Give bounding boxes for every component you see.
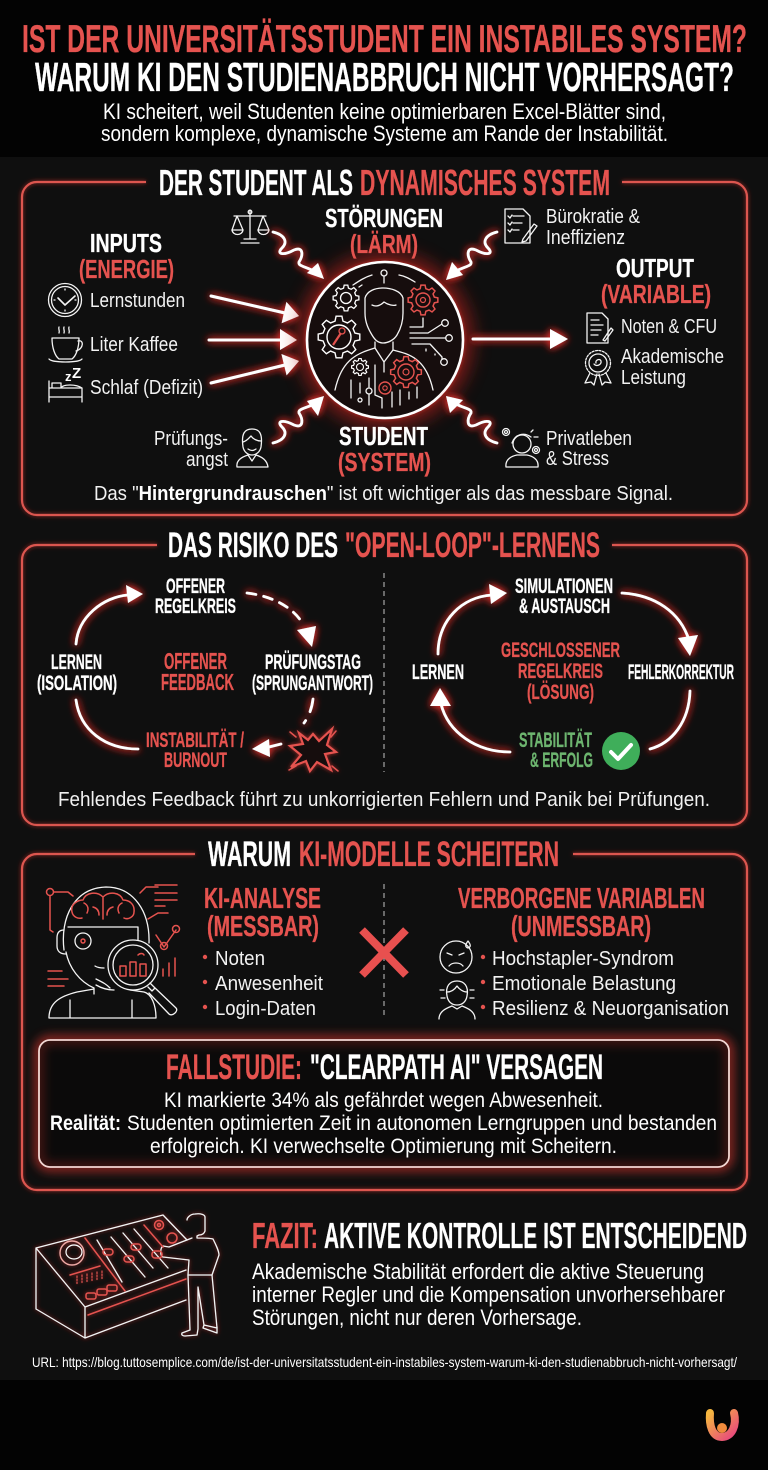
label: Störungen	[325, 203, 443, 259]
title block: sondern komplexe, dynamische Systeme am Rande der Instabilität.	[101, 121, 668, 146]
icon: logo	[710, 1413, 735, 1437]
callout: Fallstudie Clearpath AI: Realität:	[50, 1112, 121, 1135]
icon: overwhelmed person	[439, 981, 475, 1019]
node: Instabilität: BURNOUT	[164, 749, 227, 772]
divider line	[383, 884, 385, 1018]
icon: control console with operator	[36, 1214, 219, 1338]
arrows: open loop	[76, 585, 316, 757]
icon: stressed person	[502, 428, 540, 467]
output label: (VARIABLE)	[601, 279, 711, 309]
arrows: closed loop	[430, 584, 698, 752]
callout: Fallstudie Clearpath AI: KI markierte 34% als gefährdet wegen Abwesenheit.	[164, 1089, 603, 1112]
node: Stabilität: & ERFOLG	[530, 749, 593, 772]
inputs label: (ENERGIE)	[79, 254, 174, 284]
noise text: Prüfungsangst	[154, 428, 228, 471]
node: Simulationen: & AUSTAUSCH	[519, 595, 610, 618]
list: measurable data: Login-Daten	[215, 998, 316, 1020]
node: Stabilität	[519, 729, 593, 772]
list: measurable data: Noten	[215, 948, 265, 970]
panel: der Student als dynamisches System	[22, 162, 747, 515]
heading: KI-Modelle	[208, 835, 559, 874]
node: Lernen Isolation	[37, 651, 117, 695]
glow behind central circle	[297, 252, 473, 428]
divider line	[383, 573, 385, 772]
takeaway: Hintergrundrauschen: Das "Hintergrundrauschen" ist oft wichtiger als das messbare Signal.	[94, 483, 673, 505]
label: Störungen: (LÄRM)	[350, 229, 418, 259]
noise text: Prüfungsangst: Prüfungs-	[154, 428, 228, 450]
icon: bed with sleep marks: z	[65, 369, 72, 384]
node: Simulationen	[515, 575, 613, 618]
subheading: KI-Analyse: (MESSBAR)	[207, 911, 319, 943]
input text: Lernstunden: Lernstunden	[90, 290, 185, 312]
heading: Open-Loop	[168, 526, 600, 565]
conclusion text	[252, 1259, 725, 1330]
node: Instabilität: INSTABILITÄT /	[146, 729, 244, 752]
wavy arrow: top left	[273, 232, 324, 279]
takeaway: Feedback: Fehlendes Feedback führt zu unkorrigierten Fehlern und Panik bei Prüfungen.	[58, 789, 710, 811]
noise text: Privatleben: Privatleben	[546, 428, 632, 450]
node: Offener Regelkreis: REGELKREIS	[155, 595, 236, 618]
list: hidden variables	[481, 948, 729, 1020]
heading: KI-Modelle: KI-MODELLE SCHEITERN	[299, 835, 559, 874]
icon: bed with sleep marks	[49, 365, 82, 402]
label: Störungen: STÖRUNGEN	[325, 203, 443, 233]
wavy arrow: bottom right	[446, 396, 497, 443]
diagram: closed loop	[412, 575, 734, 772]
heading: Fazit: FAZIT:	[252, 1215, 318, 1256]
node: Simulationen: SIMULATIONEN	[515, 575, 613, 598]
circuit traces	[351, 270, 452, 408]
callout: Fallstudie Clearpath AI: erfolgreich. KI verwechselte Optimierung mit Scheitern.	[150, 1135, 617, 1158]
title block: KI scheitert, weil Studenten keine optimierbaren Excel-Blätter sind,	[103, 99, 666, 124]
noise text: Bürokratie: Bürokratie &	[546, 206, 641, 228]
icon: bed with sleep marks: Z	[72, 365, 81, 382]
center label: geschlossener Regelkreis: REGELKREIS	[518, 660, 603, 683]
callout: Fallstudie Clearpath AI: FALLSTUDIE:	[166, 1048, 302, 1087]
label: Student: (SYSTEM)	[338, 447, 431, 477]
node: Lernen Isolation: LERNEN	[51, 651, 102, 674]
node: Prüfungstag	[252, 651, 373, 695]
wavy arrow: top right	[446, 232, 497, 280]
output text: Leistung	[621, 346, 724, 389]
inputs label: INPUTS	[90, 228, 162, 258]
conclusion text: Akademische Stabilität erfordert die aktive Steuerung	[252, 1259, 704, 1284]
subheading: verborgene Variablen: (UNMESSBAR)	[511, 911, 651, 943]
output text: Noten: Noten & CFU	[621, 316, 717, 338]
center label: offener Feedback	[161, 648, 234, 695]
list: measurable data: Anwesenheit	[215, 973, 323, 995]
output text: Leistung: Akademische	[621, 346, 724, 368]
output text: Leistung: Leistung	[621, 367, 686, 389]
icon: rosette	[585, 350, 611, 385]
node: Lernen Isolation: (ISOLATION)	[37, 672, 117, 695]
icon: sad face	[440, 941, 472, 973]
heading: Open-Loop: DAS RISIKO DES	[168, 526, 338, 565]
label: Student: STUDENT	[339, 421, 428, 451]
node: Lernen: LERNEN	[412, 661, 464, 684]
callout: Fallstudie Clearpath AI	[39, 1040, 729, 1167]
inputs label	[79, 228, 174, 284]
gears	[318, 285, 438, 394]
noise text: Bürokratie	[546, 206, 641, 249]
title block	[22, 18, 747, 146]
node: Prüfungstag: (SPRUNGANTWORT)	[252, 672, 373, 695]
list: measurable data	[203, 948, 323, 1020]
icon: green check	[602, 732, 640, 770]
center label: geschlossener Regelkreis: GESCHLOSSENER	[501, 639, 620, 662]
icon: AI head with magnifier	[46, 885, 180, 1018]
panel: warum KI-Modelle scheitern	[22, 835, 747, 1190]
list: hidden variables: Hochstapler-Syndrom	[492, 948, 674, 970]
node: Prüfungstag: PRÜFUNGSTAG	[265, 651, 361, 674]
icon: scales	[232, 210, 269, 243]
icon: coffee cup	[49, 327, 82, 362]
node: Offener Regelkreis	[155, 575, 236, 618]
icon: red cross	[362, 930, 406, 975]
heading: dynamisches System: DER STUDENT ALS	[159, 162, 353, 203]
center label: geschlossener Regelkreis: (LÖSUNG)	[527, 681, 594, 704]
heading: Open-Loop: "OPEN-LOOP"-LERNENS	[345, 526, 600, 565]
node: Offener Regelkreis: OFFENER	[166, 575, 225, 598]
icon: graded paper	[587, 313, 613, 343]
center label: offener Feedback: FEEDBACK	[161, 669, 234, 695]
subheading: KI-Analyse: KI-ANALYSE	[204, 883, 321, 915]
student silhouette	[335, 288, 433, 390]
noise text: Privatleben	[546, 428, 632, 470]
arrows: inputs into system	[209, 296, 299, 383]
icon: explosion	[289, 729, 338, 771]
input text: Liter Kaffee: Liter Kaffee	[90, 334, 178, 356]
list: hidden variables: Resilienz & Neuorganisation	[492, 998, 729, 1020]
diagram: open loop	[37, 575, 373, 772]
callout: Fallstudie Clearpath AI: Studenten optimierten Zeit in autonomen Lerngruppen und bestanden	[127, 1112, 717, 1135]
conclusion text: Störungen, nicht nur deren Vorhersage.	[252, 1305, 582, 1330]
panel: Risiko des Open-Loop-Lernens	[22, 526, 747, 825]
wavy arrow: bottom left	[273, 396, 324, 443]
node: Instabilität	[146, 729, 244, 772]
center label: offener Feedback: OFFENER	[164, 648, 227, 674]
output label: OUTPUT	[616, 253, 694, 283]
output label	[601, 253, 711, 309]
subheading: verborgene Variablen	[458, 883, 705, 943]
node: Stabilität: STABILITÄT	[519, 729, 592, 752]
noise text: Privatleben: & Stress	[546, 448, 609, 470]
arrow: system output	[473, 329, 568, 349]
label: Student	[338, 421, 431, 477]
icon: student system circle	[307, 262, 463, 418]
heading: KI-Modelle: WARUM	[208, 835, 291, 874]
noise text: Prüfungsangst: angst	[186, 449, 228, 471]
center label: geschlossener Regelkreis	[501, 639, 620, 704]
noise text: Bürokratie: Ineffizienz	[546, 227, 625, 249]
input text: Schlaf: Schlaf (Defizit)	[90, 377, 203, 399]
list: hidden variables: Emotionale Belastung	[492, 973, 676, 995]
icon: anxious student	[237, 429, 268, 467]
icon: checklist document	[505, 209, 537, 243]
icon: clock	[48, 284, 82, 316]
subheading: KI-Analyse	[204, 883, 321, 943]
